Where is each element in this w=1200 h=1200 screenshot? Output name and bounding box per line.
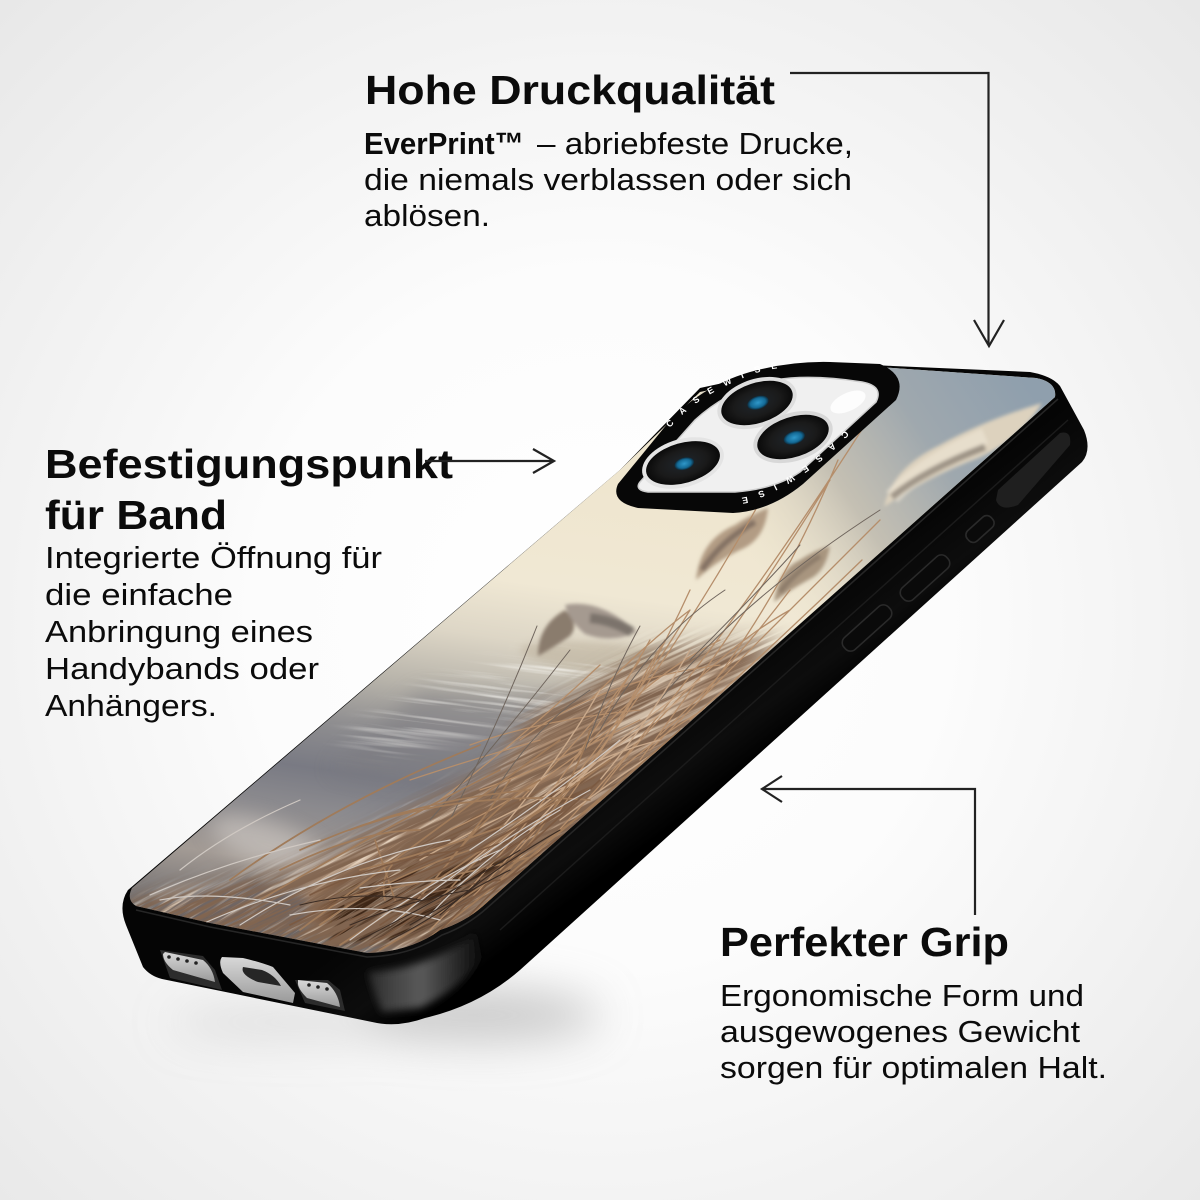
case lip highlight: [136, 399, 1058, 957]
camera island: [616, 362, 900, 513]
arrow: strap attachment: [425, 449, 554, 473]
arrow: grip: [762, 776, 975, 915]
description: die niemals verblassen oder sich: [364, 162, 852, 197]
grass mass: [150, 650, 760, 945]
callout: print quality: [364, 67, 853, 233]
grass texture: [130, 628, 782, 953]
sky tones: [700, 368, 1056, 608]
back face artwork: [130, 368, 1056, 953]
right speaker: [295, 980, 345, 1011]
heading: Befestigungspunkt: [45, 441, 453, 487]
description: [720, 978, 1107, 1085]
small plume: [774, 546, 830, 602]
description: Integrierte Öffnung für: [45, 540, 382, 575]
left lens: [636, 428, 730, 498]
brand ring text bottom: CASEWISE: [742, 432, 848, 504]
description: Ergonomische Form und: [720, 978, 1084, 1013]
heading: [45, 441, 453, 538]
centre plume: [696, 508, 768, 580]
brand ring text top: CASEWISE: [666, 366, 778, 426]
description: Anbringung eines: [45, 614, 313, 649]
description: – abriebfeste Drucke,: [537, 126, 853, 161]
flash: [827, 386, 869, 418]
side buttons: [839, 513, 997, 654]
description: Handybands oder: [45, 651, 319, 686]
top lens: [711, 368, 803, 438]
side recess: [996, 432, 1070, 508]
arrow: print quality: [790, 73, 1004, 346]
description: Anhängers.: [45, 688, 217, 723]
left speaker: [160, 950, 222, 990]
left plume: [538, 604, 637, 656]
callout: grip: [720, 919, 1107, 1085]
phone shadow: [170, 989, 600, 1041]
description: [45, 540, 382, 723]
description: ablösen.: [364, 198, 490, 233]
heading: für Band: [45, 492, 227, 538]
description: sorgen für optimalen Halt.: [720, 1050, 1107, 1085]
charging port: [220, 957, 295, 1003]
far right plume: [884, 403, 1042, 507]
heading: Perfekter Grip: [720, 919, 1009, 965]
glossy corner: [368, 932, 482, 1012]
right lens: [747, 402, 839, 472]
callout: strap attachment: [45, 441, 453, 723]
description: [364, 126, 853, 233]
description: EverPrint™: [364, 126, 524, 161]
sea and mist: [152, 640, 684, 906]
phone case: [122, 362, 1088, 1024]
description: ausgewogenes Gewicht: [720, 1014, 1080, 1049]
camera window: [638, 377, 878, 492]
grass strands: [150, 420, 880, 950]
plumes: [538, 403, 1042, 656]
description: die einfache: [45, 577, 233, 612]
side bevel: [500, 420, 1068, 930]
case body: [122, 362, 1088, 1024]
heading: Hohe Druckqualität: [365, 67, 775, 113]
